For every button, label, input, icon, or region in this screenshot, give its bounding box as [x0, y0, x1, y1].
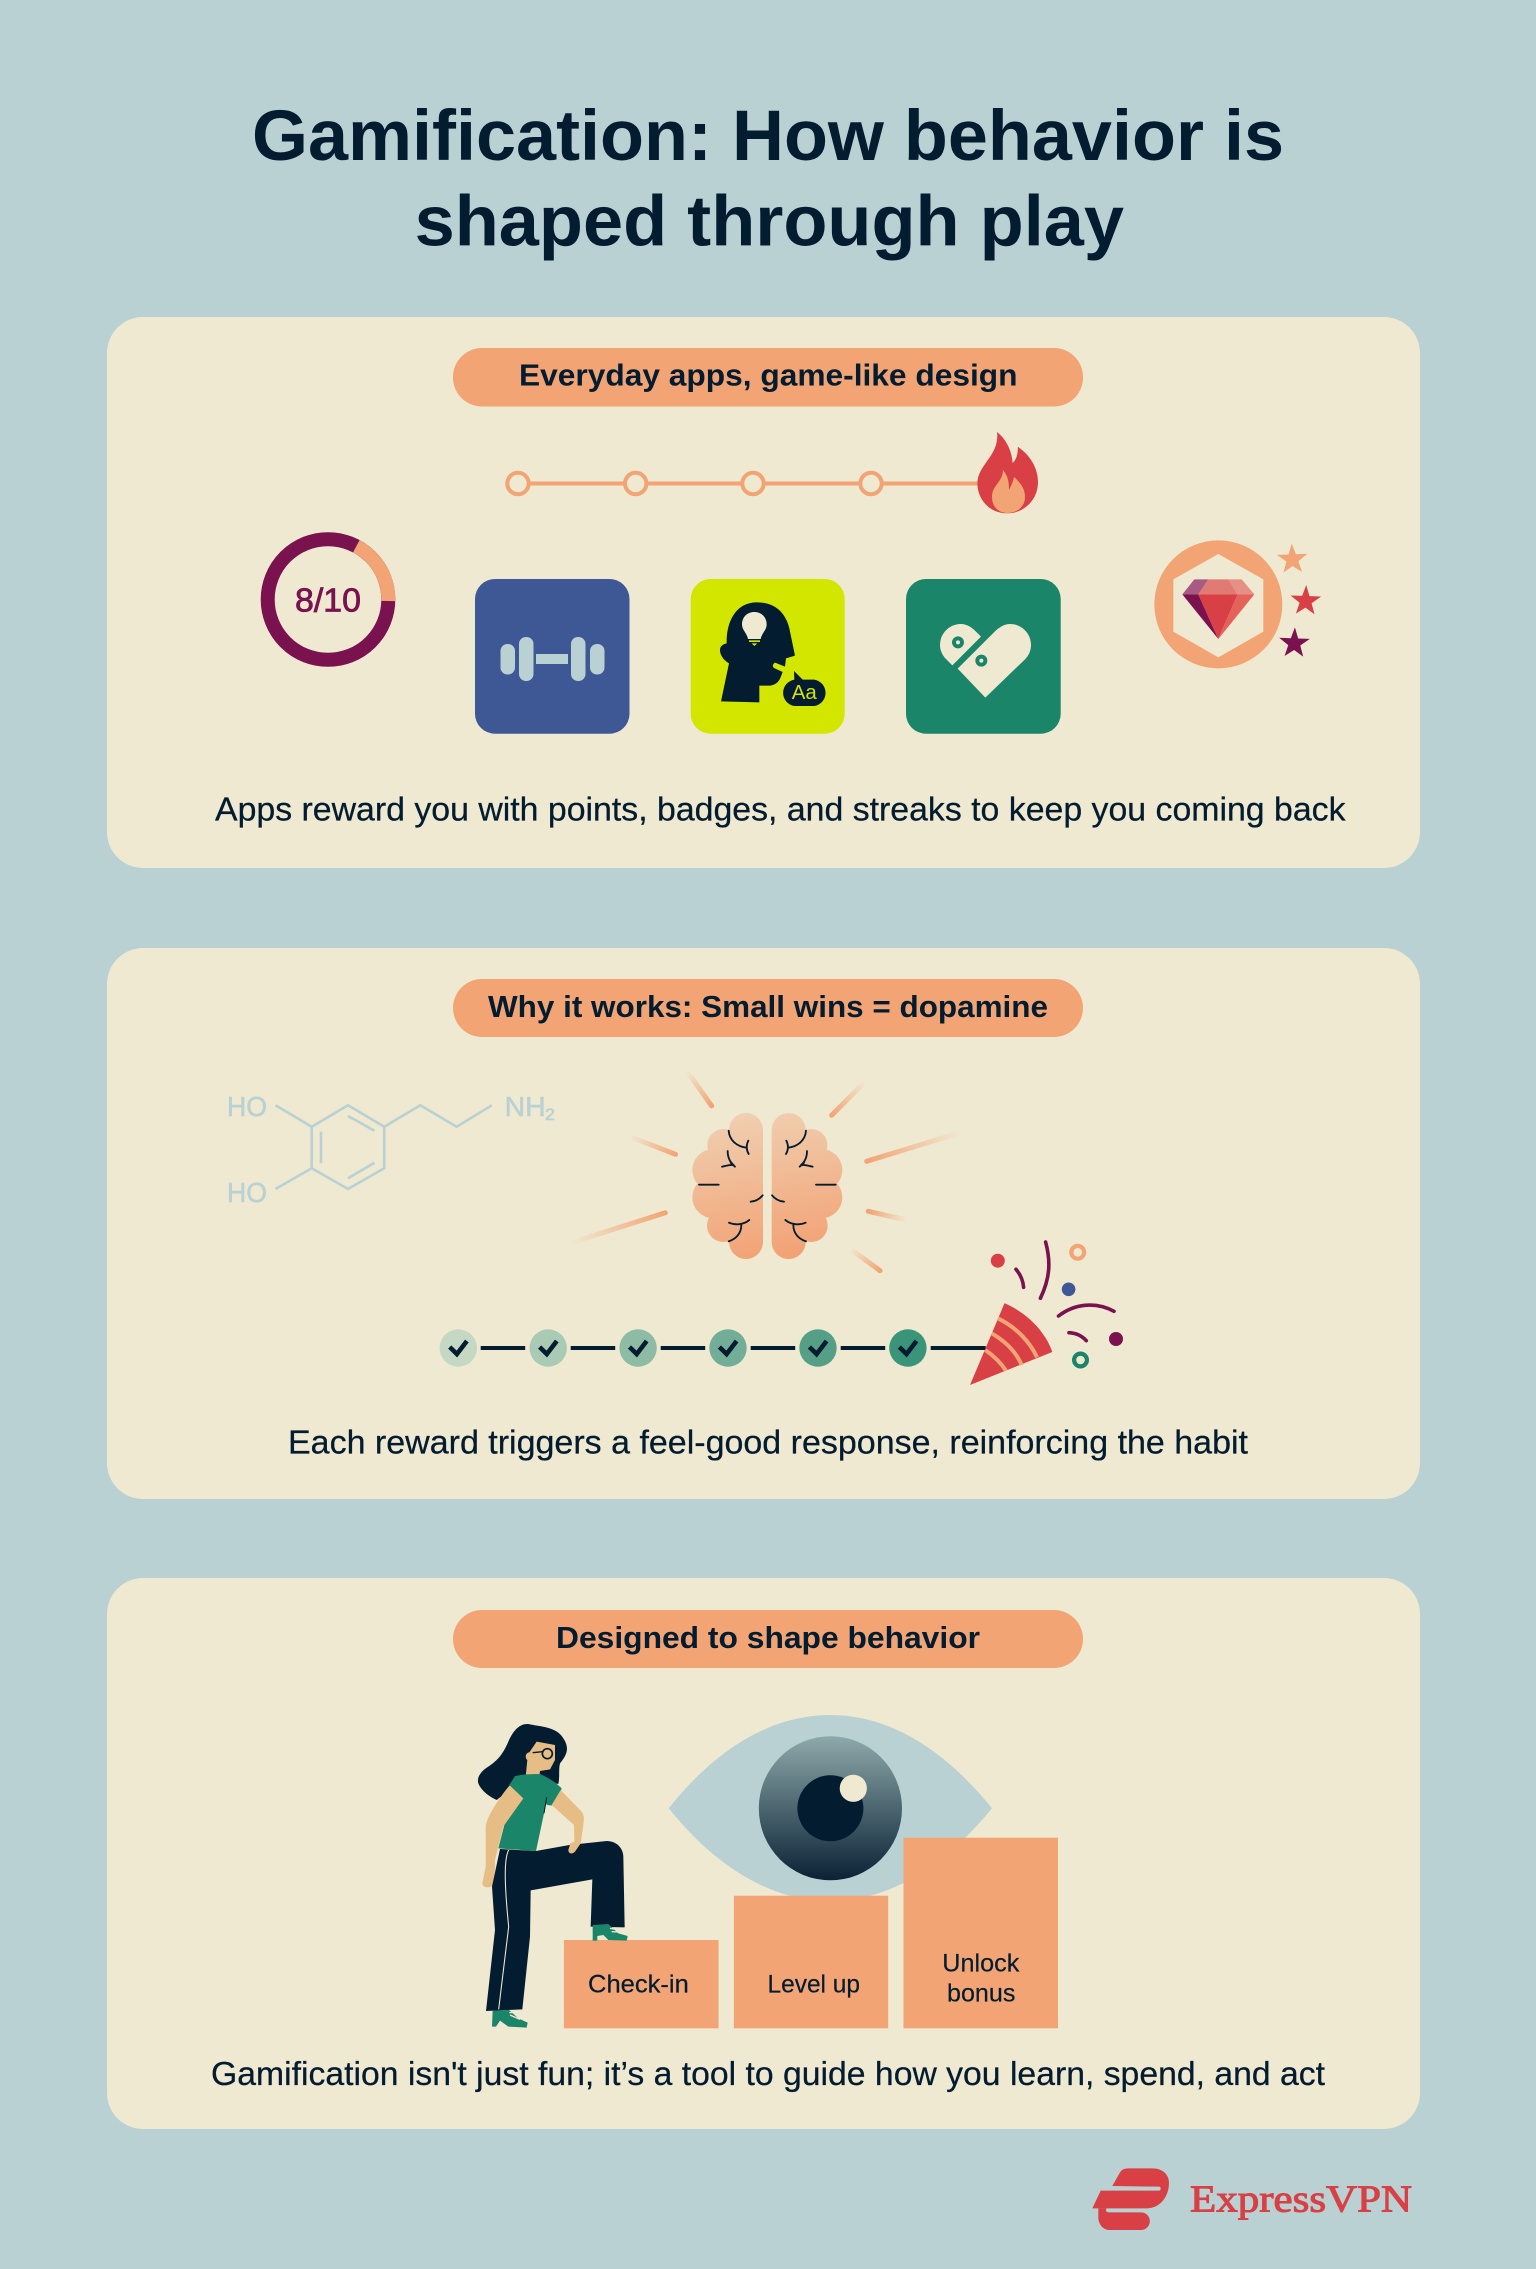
title: shaped through play — [415, 183, 1125, 262]
app tile: language learning: Aa — [792, 681, 817, 704]
illustration: woman stepping up — [478, 1724, 628, 2028]
progress check chain — [440, 1329, 986, 1367]
caption: reward: Each reward triggers a feel-good response, reinforcing the habit — [288, 1424, 1248, 1461]
step: unlock bonus: Unlock — [942, 1950, 1020, 1978]
step: level up — [734, 1896, 888, 2028]
title: Gamification: How behavior is — [252, 97, 1284, 176]
panel: everyday apps — [107, 317, 1420, 868]
logo: ExpressVPN: ExpressVPN — [1190, 2179, 1412, 2221]
score ring 8/10 — [268, 539, 388, 660]
panel background — [107, 1578, 1420, 2129]
burst rays around brain — [571, 1071, 960, 1271]
panel background — [107, 948, 1420, 1499]
heading pill: everyday apps — [453, 348, 1083, 406]
icon: eye — [669, 1715, 992, 1901]
heading pill: shape behavior: Designed to shape behavior — [556, 1620, 980, 1655]
heading pill: dopamine — [453, 979, 1083, 1037]
icon: gem badge with stars — [1154, 540, 1322, 668]
streak line with circles — [507, 473, 985, 494]
step: check-in: Check-in — [588, 1971, 689, 1999]
icon: flame — [977, 432, 1038, 513]
icon: brain — [692, 1113, 842, 1259]
panel: why it works — [107, 948, 1420, 1499]
step: unlock bonus: bonus — [947, 1980, 1015, 2008]
dopamine molecule: HO — [227, 1091, 267, 1122]
dopamine molecule: NH — [505, 1091, 546, 1122]
heading pill: shape behavior — [453, 1610, 1083, 1668]
step: level up: Level up — [768, 1971, 860, 1999]
step: check-in — [564, 1940, 718, 2028]
logo: ExpressVPN — [1092, 2168, 1412, 2230]
panel: shape behavior — [107, 1578, 1420, 2129]
app tile: health heart — [906, 579, 1061, 734]
dopamine molecule: 2 — [545, 1105, 555, 1124]
title — [252, 97, 1284, 262]
score ring 8/10: 8/10 — [295, 582, 361, 619]
caption: apps: Apps reward you with points, badges, and streaks to keep you coming back — [215, 791, 1346, 828]
heading pill: everyday apps: Everyday apps, game-like design — [519, 358, 1018, 392]
dopamine molecule: HO — [227, 1177, 267, 1208]
dopamine molecule — [227, 1091, 555, 1208]
icon: party popper — [970, 1242, 1123, 1385]
caption: gamification: Gamification isn't just fun; it’s a tool to guide how you learn, spend, and act — [211, 2055, 1325, 2092]
heading pill: dopamine: Why it works: Small wins = dopamine — [488, 989, 1048, 1024]
step: unlock bonus — [904, 1838, 1058, 2028]
app tile: fitness — [475, 579, 630, 734]
app tile: language learning — [691, 579, 845, 734]
panel background — [107, 317, 1420, 868]
